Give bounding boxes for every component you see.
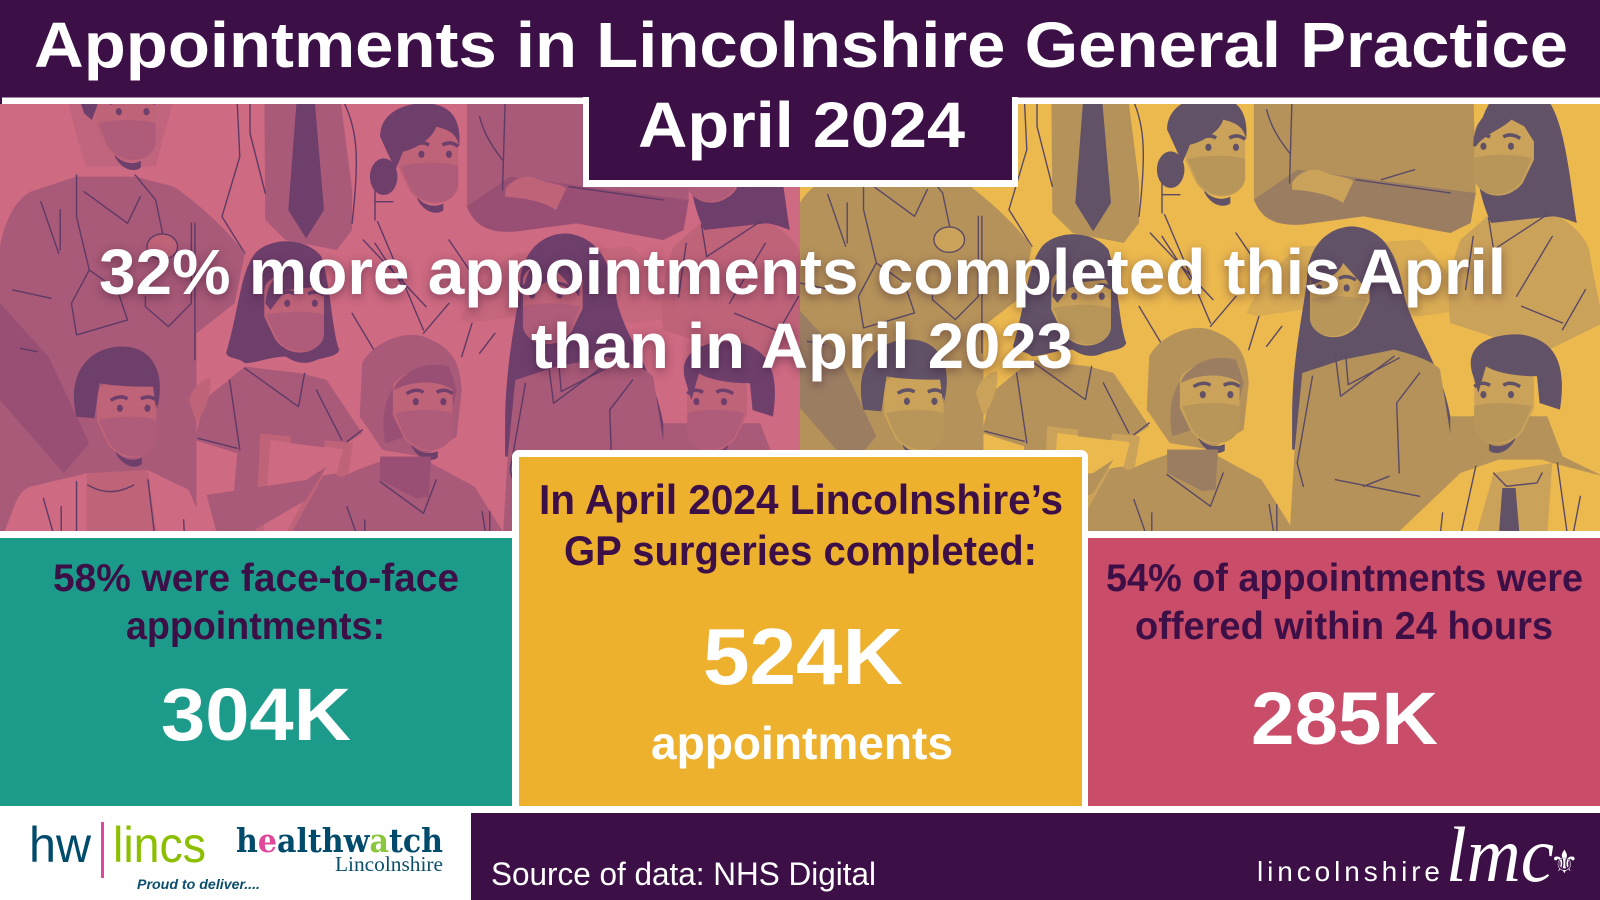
logo: Lincolnshire LMC: lmc bbox=[1446, 811, 1554, 898]
text: 24 hours description: 54% of appointments were bbox=[1106, 557, 1583, 600]
headline statement: 32% more appointments completed this April bbox=[99, 236, 1506, 308]
text: face-to-face description bbox=[53, 557, 459, 648]
panel: total appointments bbox=[512, 450, 1088, 813]
logo: healthwatch Lincolnshire: healthwatch bbox=[236, 821, 443, 860]
title banner bbox=[0, 0, 1600, 187]
text: total description bbox=[539, 476, 1063, 574]
logo: healthwatch Lincolnshire bbox=[236, 821, 443, 876]
panel: offered within 24 hours bbox=[1088, 538, 1600, 806]
title tab bbox=[583, 90, 1018, 187]
panel: face-to-face appointments bbox=[0, 538, 512, 806]
panel: illustration background, pink tinted left half bbox=[0, 104, 800, 531]
text: appointments: appointments bbox=[651, 717, 953, 769]
logo: hw lincs bbox=[29, 817, 260, 892]
text: 24 hours description: offered within 24 hours bbox=[1135, 605, 1553, 648]
logo: Lincolnshire LMC: ⚜ bbox=[1550, 843, 1579, 881]
number: 285K: 285K bbox=[1251, 677, 1438, 760]
text: data source: Source of data: NHS Digital bbox=[491, 856, 876, 892]
panel: illustration background, yellow tinted right half bbox=[800, 104, 1600, 531]
logo: Lincolnshire LMC bbox=[1257, 811, 1579, 898]
logo: Lincolnshire LMC: lincolnshire bbox=[1257, 856, 1440, 887]
logo: hw lincs: lincs bbox=[113, 817, 206, 873]
text: face-to-face description: 58% were face-to-face bbox=[53, 557, 459, 600]
headline statement bbox=[99, 236, 1506, 382]
text: face-to-face description: appointments: bbox=[126, 605, 385, 648]
headline statement: than in April 2023 bbox=[531, 310, 1073, 382]
logo: hw lincs: Proud to deliver.... bbox=[137, 876, 260, 892]
text: total description: GP surgeries completed: bbox=[564, 527, 1037, 574]
text: total description: In April 2024 Lincolnshire’s bbox=[539, 476, 1063, 523]
heading line one: Appointments in Lincolnshire General Practice bbox=[34, 9, 1568, 81]
heading line two: April 2024 bbox=[638, 89, 965, 161]
logo: healthwatch Lincolnshire: Lincolnshire bbox=[335, 852, 443, 876]
number: 304K: 304K bbox=[161, 673, 351, 756]
panel: source footer bbox=[471, 811, 1600, 900]
text: 24 hours description bbox=[1106, 557, 1583, 648]
logo: hw lincs: hw bbox=[29, 817, 92, 873]
number: 524K: 524K bbox=[703, 612, 903, 701]
white band above stat panels bbox=[0, 531, 1600, 538]
